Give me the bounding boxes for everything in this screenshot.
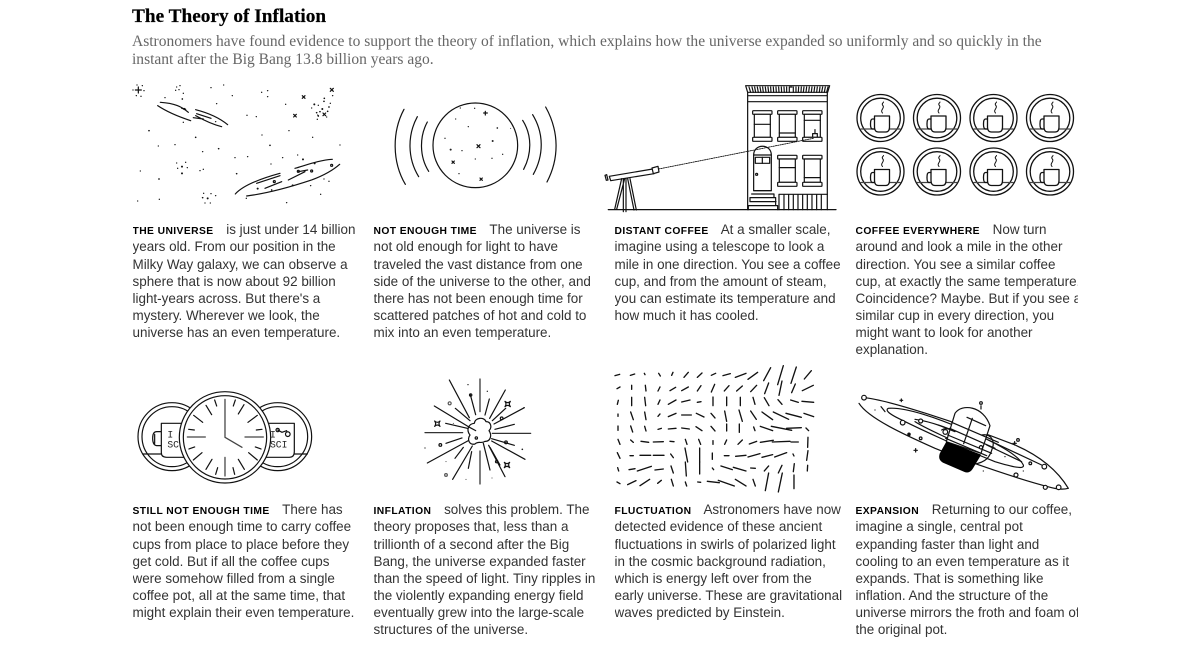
orbits [859, 398, 1068, 489]
text: inflation: structures of the universe. [374, 622, 528, 637]
stars in sphere [444, 107, 511, 174]
text: still not enough time: STILL NOT ENOUGH TIME There has [132, 502, 343, 517]
right mug: I [270, 429, 276, 440]
text: not enough time [374, 222, 591, 340]
coffee cup 5 [857, 148, 904, 195]
text: expansion: expands. That is something like [856, 571, 1043, 586]
text: fluctuation: waves predicted by Einstein. [614, 605, 785, 620]
text: distant coffee: imagine using a telescope to look a [614, 239, 824, 254]
text: fluctuation: FLUCTUATION Astronomers have now [614, 502, 841, 517]
text: still not enough time: were somehow filled from a single [132, 571, 335, 586]
text: not enough time: NOT ENOUGH TIME The universe is [374, 222, 581, 237]
text: still not enough time: get cold. But if all the coffee cups [132, 554, 329, 569]
text: distant coffee: mile in one direction. You see a coffee [614, 256, 841, 272]
text: not enough time: there has not been enough time for [374, 291, 583, 306]
text: expansion: inflation. And the structure of the [856, 588, 1048, 603]
right mug [244, 403, 312, 471]
particles [469, 394, 472, 396]
coffee cup 4 [1026, 94, 1074, 142]
text: not enough time: scattered patches of hot and cold to [374, 308, 586, 323]
right mug: SCI [270, 439, 287, 450]
orbit bodies [862, 395, 1061, 490]
text: expansion: EXPANSION Returning to our coffee, [856, 502, 1072, 517]
illustration: the universe [132, 84, 341, 204]
text: not enough time: side of the universe to the other, and [374, 274, 591, 289]
text: still not enough time [132, 502, 354, 620]
stars [132, 84, 341, 204]
coffee cup 6 [914, 148, 960, 195]
left mug: SCI [167, 439, 185, 450]
left mug: I [167, 429, 173, 440]
coffee cup in window [813, 130, 817, 137]
text: inflation: Bang, the universe expanded faster [374, 554, 586, 569]
text: still not enough time: not been enough time to carry coffee [132, 519, 351, 534]
text: distant coffee: how much it has cooled. [614, 308, 759, 323]
door [754, 146, 771, 191]
text: coffee everywhere: direction. You see a similar coffee [856, 256, 1055, 272]
text: the universe [132, 222, 355, 340]
text: inflation: theory proposes that, less than a [374, 519, 568, 534]
text: still not enough time: cups from place to place before they [132, 536, 349, 552]
text: the universe: mystery. Wherever we look, the [132, 308, 320, 323]
text: inflation: the violently expanding energy field [374, 588, 583, 603]
text: not enough time: traveled the vast distance from one [374, 256, 583, 272]
text: coffee everywhere: cup, at exactly the same temperature. [856, 274, 1078, 289]
illustration: coffee everywhere [857, 94, 1074, 195]
text: distant coffee: cup, and from the amount of steam, [614, 274, 827, 289]
coffee cup 2 [914, 94, 960, 142]
text: the universe: sphere that is now about 92 billion [132, 274, 336, 289]
text: coffee everywhere: similar cup in every direction, you [856, 308, 1054, 323]
text: fluctuation: detected evidence of these ancient [614, 519, 822, 534]
text: the universe: light-years across. But there's a [132, 291, 320, 306]
text: expansion: cooling to an even temperature as it [856, 554, 1069, 569]
text: fluctuation: in the cosmic background radiation, [614, 554, 826, 569]
text: still not enough time: coffee pot, all at the same time, that [132, 588, 345, 603]
stripes across pot [938, 422, 1042, 465]
illustration: inflation [424, 379, 531, 484]
text: coffee everywhere: might want to look for another [856, 325, 1033, 340]
text: distant coffee [614, 222, 841, 323]
lower galaxy [235, 159, 340, 196]
illustration: expansion [859, 395, 1068, 490]
subtitle: Astronomers have found evidence to support the theory of inflation, which explains how the universe expanded so uniformly and so quickly in the [132, 33, 1042, 50]
text: inflation: than the speed of light. Tiny ripples in [374, 571, 595, 586]
clock [179, 392, 271, 483]
ground [608, 208, 836, 211]
waves left [395, 109, 429, 184]
burst rays [425, 379, 531, 484]
universe sphere [433, 103, 518, 188]
coffee pot [938, 402, 1042, 472]
text: the universe: years old. From our position in the [132, 239, 336, 254]
sight line [659, 138, 813, 169]
text: coffee everywhere: Coincidence? Maybe. But if you see a [856, 291, 1078, 306]
text: the universe: THE UNIVERSE is just under 14 billion [132, 222, 355, 237]
sparkles [435, 401, 510, 468]
text: fluctuation: which is energy left over from the [614, 571, 812, 586]
waves right [523, 107, 556, 182]
building [746, 86, 830, 210]
text: inflation: INFLATION solves this problem. The [374, 502, 589, 517]
text: coffee everywhere [856, 222, 1078, 357]
coffee cup 3 [970, 94, 1017, 142]
text: distant coffee: DISTANT COFFEE At a smaller scale, [614, 222, 830, 237]
illustration: distant coffee [605, 86, 836, 212]
text: expansion: universe mirrors the froth and foam of [856, 605, 1078, 620]
coffee cup 1 [857, 94, 904, 142]
text: expansion: the original pot. [856, 622, 947, 637]
text: still not enough time: might explain their even temperature. [132, 605, 354, 620]
stoop [748, 191, 778, 210]
text: coffee everywhere: explanation. [856, 342, 928, 357]
text: the universe: Milky Way galaxy, we can observe a [132, 256, 348, 272]
windows lower [778, 155, 822, 186]
text: inflation: trillionth of a second after the Big [374, 536, 569, 552]
text: fluctuation: early universe. These are gravitational [614, 588, 842, 603]
text: not enough time: mix into an even temperature. [374, 325, 551, 340]
title: The Theory of Inflation [132, 6, 326, 27]
windows upper [753, 111, 822, 141]
left mug [138, 403, 206, 471]
text: fluctuation: fluctuations in swirls of polarized light [614, 536, 836, 552]
illustration: still not enough time [138, 392, 312, 483]
text: distant coffee: you can estimate its temperature and [614, 291, 836, 306]
illustration: fluctuation [615, 366, 814, 492]
text: expansion: expanding faster than light and [856, 536, 1039, 552]
telescope [605, 166, 659, 212]
text: coffee everywhere: around and look a mile in the other [856, 239, 1062, 254]
text: expansion [856, 502, 1078, 637]
text: inflation: eventually grew into the large-scale [374, 605, 584, 620]
subtitle [132, 33, 1042, 68]
text: expansion: imagine a single, central pot [856, 519, 1023, 534]
coffee cup 7 [970, 148, 1017, 195]
subtitle: instant after the Big Bang 13.8 billion years ago. [132, 51, 434, 68]
central cloud [468, 418, 491, 444]
illustration: not enough time [395, 103, 556, 188]
upper galaxy [158, 102, 228, 127]
coffee cup 8 [1026, 148, 1074, 195]
pot black base [940, 442, 980, 472]
text: the universe: universe has an even temperature. [132, 325, 340, 340]
text: coffee everywhere: COFFEE EVERYWHERE Now turn [856, 222, 1046, 237]
text: not enough time: not old enough for light to have [374, 239, 558, 254]
text: inflation [374, 502, 595, 637]
text: fluctuation [614, 502, 842, 620]
